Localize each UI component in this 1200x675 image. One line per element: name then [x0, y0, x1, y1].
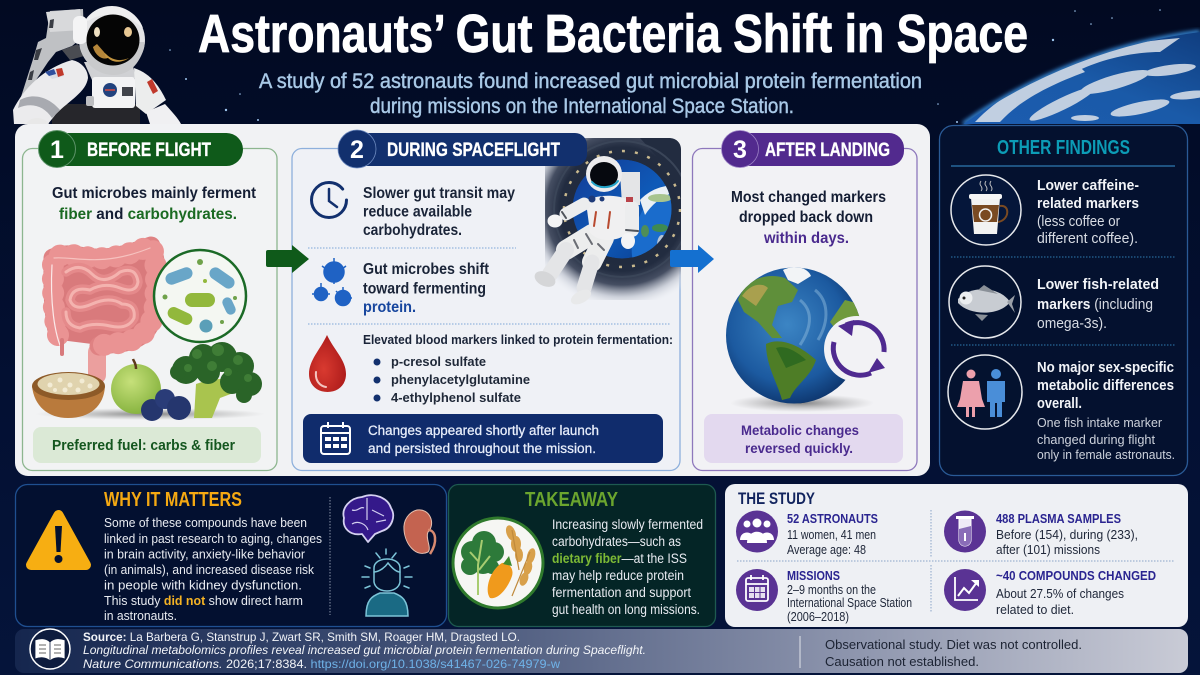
text: sex differences [1037, 360, 1174, 412]
text: fish markers: markers (including [1037, 297, 1153, 313]
small astronaut [532, 156, 640, 307]
stat: 52 astronauts: 11 women, 41 men [787, 527, 876, 542]
text: why it matters body: This study did not show direct harm [104, 593, 303, 608]
callout: preferred fuel [33, 427, 261, 463]
text: study limitations: Observational study. Diet was not controlled. [825, 638, 1082, 652]
stat: plasma samples: after (101) missions [996, 542, 1100, 557]
stat: compounds changed [996, 568, 1156, 617]
heading: takeaway: TAKEAWAY [525, 489, 619, 511]
text: sex differences: No major sex-specific [1037, 360, 1174, 376]
text: fish markers: Lower fish-related [1037, 277, 1159, 293]
stat: missions: 2–9 months on the [787, 583, 876, 597]
icon: bacteria magnifier [154, 250, 246, 342]
text: fermentation summary: fiber and carbohydrates. [59, 206, 237, 223]
heading: during spaceflight: 2 [350, 136, 364, 164]
icon: kidney [404, 510, 435, 554]
text: takeaway body: fermentation and support [552, 585, 691, 600]
callout: preferred fuel: Preferred fuel: carbs & fiber [52, 437, 235, 454]
heading: the study: THE STUDY [738, 489, 816, 508]
heading: after landing: 3 [733, 136, 747, 164]
text: why it matters body: in brain activity, anxiety-like behavior [104, 546, 306, 562]
stat: missions [787, 568, 912, 624]
text: takeaway body: carbohydrates—such as [552, 534, 681, 549]
text: takeaway body: Increasing slowly fermented [552, 517, 703, 532]
text: caffeine: related markers [1037, 196, 1139, 212]
icon: open book [30, 629, 70, 669]
text: fish marker note: One fish intake marker [1037, 416, 1162, 430]
text: study limitations: Causation not established. [825, 655, 979, 669]
text: caffeine: (less coffee or [1037, 214, 1120, 230]
heading: why it matters: WHY IT MATTERS [104, 489, 242, 511]
text: takeaway body: gut health on long missions. [552, 602, 700, 617]
text: blood markers: p-cresol sulfate [391, 354, 486, 369]
icon: test tube [944, 510, 986, 552]
text: why it matters body: Some of these compounds have been [104, 515, 307, 530]
text: markers dropped [731, 189, 886, 247]
text: caffeine: different coffee). [1037, 231, 1138, 247]
stat: plasma samples: Before (154), during (233), [996, 527, 1138, 542]
panel: other findings [940, 126, 1188, 476]
text: blood markers: 4-ethylphenol sulfate [391, 390, 521, 405]
subtitle: A study of 52 astronauts found increased gut microbial protein fermentation [259, 70, 922, 93]
text: caffeine [1037, 178, 1139, 247]
callout: reversal [704, 414, 903, 463]
arrow: before to during [266, 245, 309, 273]
illustration: porthole with astronaut [534, 138, 681, 304]
text: microbes shift: protein. [363, 299, 416, 316]
footer [15, 629, 1188, 673]
text: fish marker note: only in female astronauts. [1037, 448, 1175, 462]
icon: fish [949, 266, 1021, 338]
text: slower transit: reduce available [363, 204, 472, 220]
stat: compounds changed: related to diet. [996, 602, 1074, 617]
icon: intestines [51, 246, 156, 375]
text: caffeine: Lower caffeine- [1037, 178, 1139, 194]
subtitle [259, 70, 922, 118]
stat: compounds changed: ~40 COMPOUNDS CHANGED [996, 568, 1156, 583]
stat: 52 astronauts: 52 ASTRONAUTS [787, 511, 878, 526]
text: takeaway body: may help reduce protein [552, 568, 684, 583]
text: source citation: Longitudinal metabolomics profiles reveal increased gut microbial protein fermentation during Spaceflight. [83, 643, 646, 657]
panel: main timeline background [15, 124, 930, 476]
text: fish marker note [1037, 416, 1175, 462]
icon: astronauts [736, 510, 778, 552]
text: markers dropped: Most changed markers [731, 189, 886, 206]
text: blood markers [363, 333, 673, 405]
text: microbes shift: Gut microbes shift [363, 261, 489, 278]
text: fish marker note: changed during flight [1037, 433, 1156, 447]
stat: missions: MISSIONS [787, 568, 840, 583]
text: why it matters body: in astronauts. [104, 608, 177, 623]
astronaut, top left [13, 6, 181, 125]
text: fish markers [1037, 277, 1159, 332]
text: slower transit: Slower gut transit may [363, 185, 515, 202]
text: markers dropped: dropped back down [739, 209, 873, 226]
callout: reversal: reversed quickly. [745, 440, 853, 456]
icon: calendar [736, 569, 778, 611]
text: fermentation summary [52, 185, 257, 223]
panel: why it matters [16, 484, 446, 626]
planet earth, top right [963, 32, 1200, 125]
icon: fibre foods [32, 342, 265, 421]
icon: brain [343, 495, 393, 542]
icon: rising chart [944, 569, 986, 611]
panel: takeaway [448, 484, 716, 626]
text: takeaway body: dietary fiber—at the ISS [552, 551, 687, 566]
text: markers dropped: within days. [763, 230, 849, 247]
arrow: during to after [670, 245, 714, 273]
heading: after landing: AFTER LANDING [765, 140, 890, 161]
subtitle: during missions on the International Space Station. [370, 95, 794, 118]
text: blood markers: phenylacetylglutamine [391, 372, 530, 387]
callout: timing: Changes appeared shortly after launch [368, 423, 599, 438]
text: why it matters body: linked in past research to aging, changes [104, 531, 322, 546]
text: study limitations [825, 638, 1082, 669]
text: why it matters body: (in animals), and increased disease risk [104, 562, 314, 577]
stat: missions: (2006–2018) [787, 610, 849, 624]
icon: warning triangle [31, 515, 86, 565]
icon: anxious person [362, 549, 412, 616]
callout: timing: and persisted throughout the mission. [368, 441, 596, 456]
icon: microbes [312, 258, 352, 306]
text: takeaway body [552, 517, 703, 617]
stat: 52 astronauts [787, 511, 878, 557]
stat: compounds changed: About 27.5% of changes [996, 586, 1124, 601]
icon: blood drop [309, 335, 346, 392]
text: fish markers: omega-3s). [1037, 316, 1107, 332]
panel: after landing [692, 130, 917, 470]
text: microbes shift [363, 261, 489, 316]
heading: after landing [722, 130, 904, 168]
panel: the study [725, 484, 1188, 627]
heading: before flight [38, 130, 243, 168]
callout: timing [303, 414, 663, 463]
icon: clock [312, 182, 346, 218]
text: source citation [83, 630, 646, 671]
icon: female and male figures [948, 355, 1022, 429]
stat: 52 astronauts: Average age: 48 [787, 542, 866, 557]
text: slower transit [363, 185, 515, 239]
text: sex differences: overall. [1037, 396, 1082, 412]
text: fermentation summary: Gut microbes mainly ferment [52, 185, 257, 202]
stat: plasma samples: 488 PLASMA SAMPLES [996, 511, 1121, 526]
stat: plasma samples [996, 511, 1138, 557]
heading: before flight: 1 [50, 136, 64, 164]
text: sex differences: metabolic differences [1037, 378, 1174, 394]
text: slower transit: carbohydrates. [363, 222, 462, 239]
text: blood markers: Elevated blood markers linked to protein fermentation: [363, 333, 673, 347]
panel: during spaceflight [291, 130, 681, 472]
stat: missions: International Space Station [787, 596, 912, 610]
icon: globe with recycle arrows [726, 267, 890, 412]
icon: coffee cup [951, 175, 1021, 245]
heading: during spaceflight: DURING SPACEFLIGHT [387, 140, 560, 161]
text: why it matters body: in people with kidney dysfunction. [104, 578, 302, 592]
heading: other findings: OTHER FINDINGS [997, 137, 1130, 159]
text: source citation: Nature Communications. 2026;17:8384. https://doi.org/10.1038/s41467-026-74979-w [83, 657, 560, 671]
heading: during spaceflight [338, 130, 587, 168]
title: Astronauts’ Gut Bacteria Shift in Space [198, 4, 1028, 64]
text: why it matters body [104, 515, 322, 623]
heading: before flight: BEFORE FLIGHT [87, 140, 211, 161]
text: source citation: Source: La Barbera G, Stanstrup J, Zwart SR, Smith SM, Roager HM, Dragsted LO. [83, 630, 520, 644]
callout: reversal: Metabolic changes [741, 422, 859, 438]
panel: before flight [22, 130, 277, 470]
icon: vegetables [453, 518, 543, 608]
stars [169, 9, 1161, 123]
text: microbes shift: toward fermenting [363, 280, 486, 298]
